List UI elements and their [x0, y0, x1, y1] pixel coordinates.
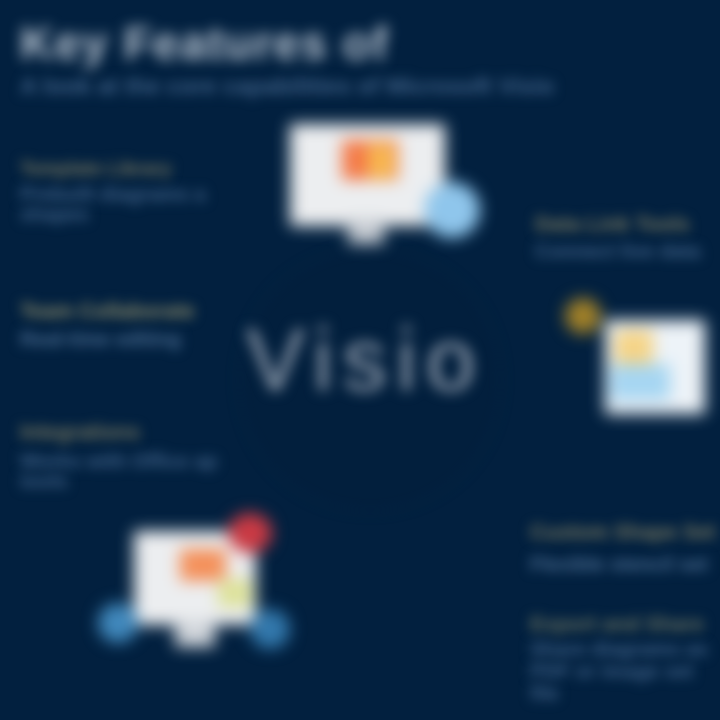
panel: feature two: Team Collaborate	[20, 300, 195, 323]
panel: feature two	[16, 297, 199, 354]
icon: monitor top	[276, 110, 492, 256]
center circle	[240, 250, 500, 510]
panel: feature one: Prebuilt diagrams a	[20, 184, 206, 206]
panel: feature six	[526, 611, 710, 705]
panel: feature six: Share diagrams as	[530, 639, 708, 661]
panel: feature two: Real-time editing	[20, 329, 181, 351]
panel: feature one	[17, 156, 208, 228]
icon: monitor bottom	[88, 502, 300, 660]
panel: feature three	[15, 420, 220, 493]
panel: feature four: Connect live data	[535, 241, 701, 263]
panel: feature five	[526, 518, 720, 576]
icon: document right	[554, 288, 718, 428]
panel: feature three: Works with Office ap	[20, 451, 217, 473]
panel: feature one: shapes	[20, 204, 89, 226]
panel: feature four	[530, 210, 704, 263]
panel: feature four: Data Link Tools	[535, 213, 690, 236]
panel: feature five: Custom Shape Set	[530, 521, 716, 544]
panel: feature three: tools	[20, 471, 68, 493]
panel: feature six: PDF or image set	[530, 661, 693, 683]
panel: feature five: Flexible stencil set	[530, 554, 708, 576]
center label: Visio	[246, 310, 485, 409]
title: Key Features of	[20, 17, 389, 69]
panel: feature six: file	[530, 683, 559, 705]
subtitle: A look at the core capabilities of Microsoft Visio	[20, 73, 554, 99]
panel: feature three: Integrations	[20, 421, 140, 444]
panel: feature one: Template Library	[20, 159, 172, 180]
panel: feature six: Export and Share	[530, 613, 704, 636]
